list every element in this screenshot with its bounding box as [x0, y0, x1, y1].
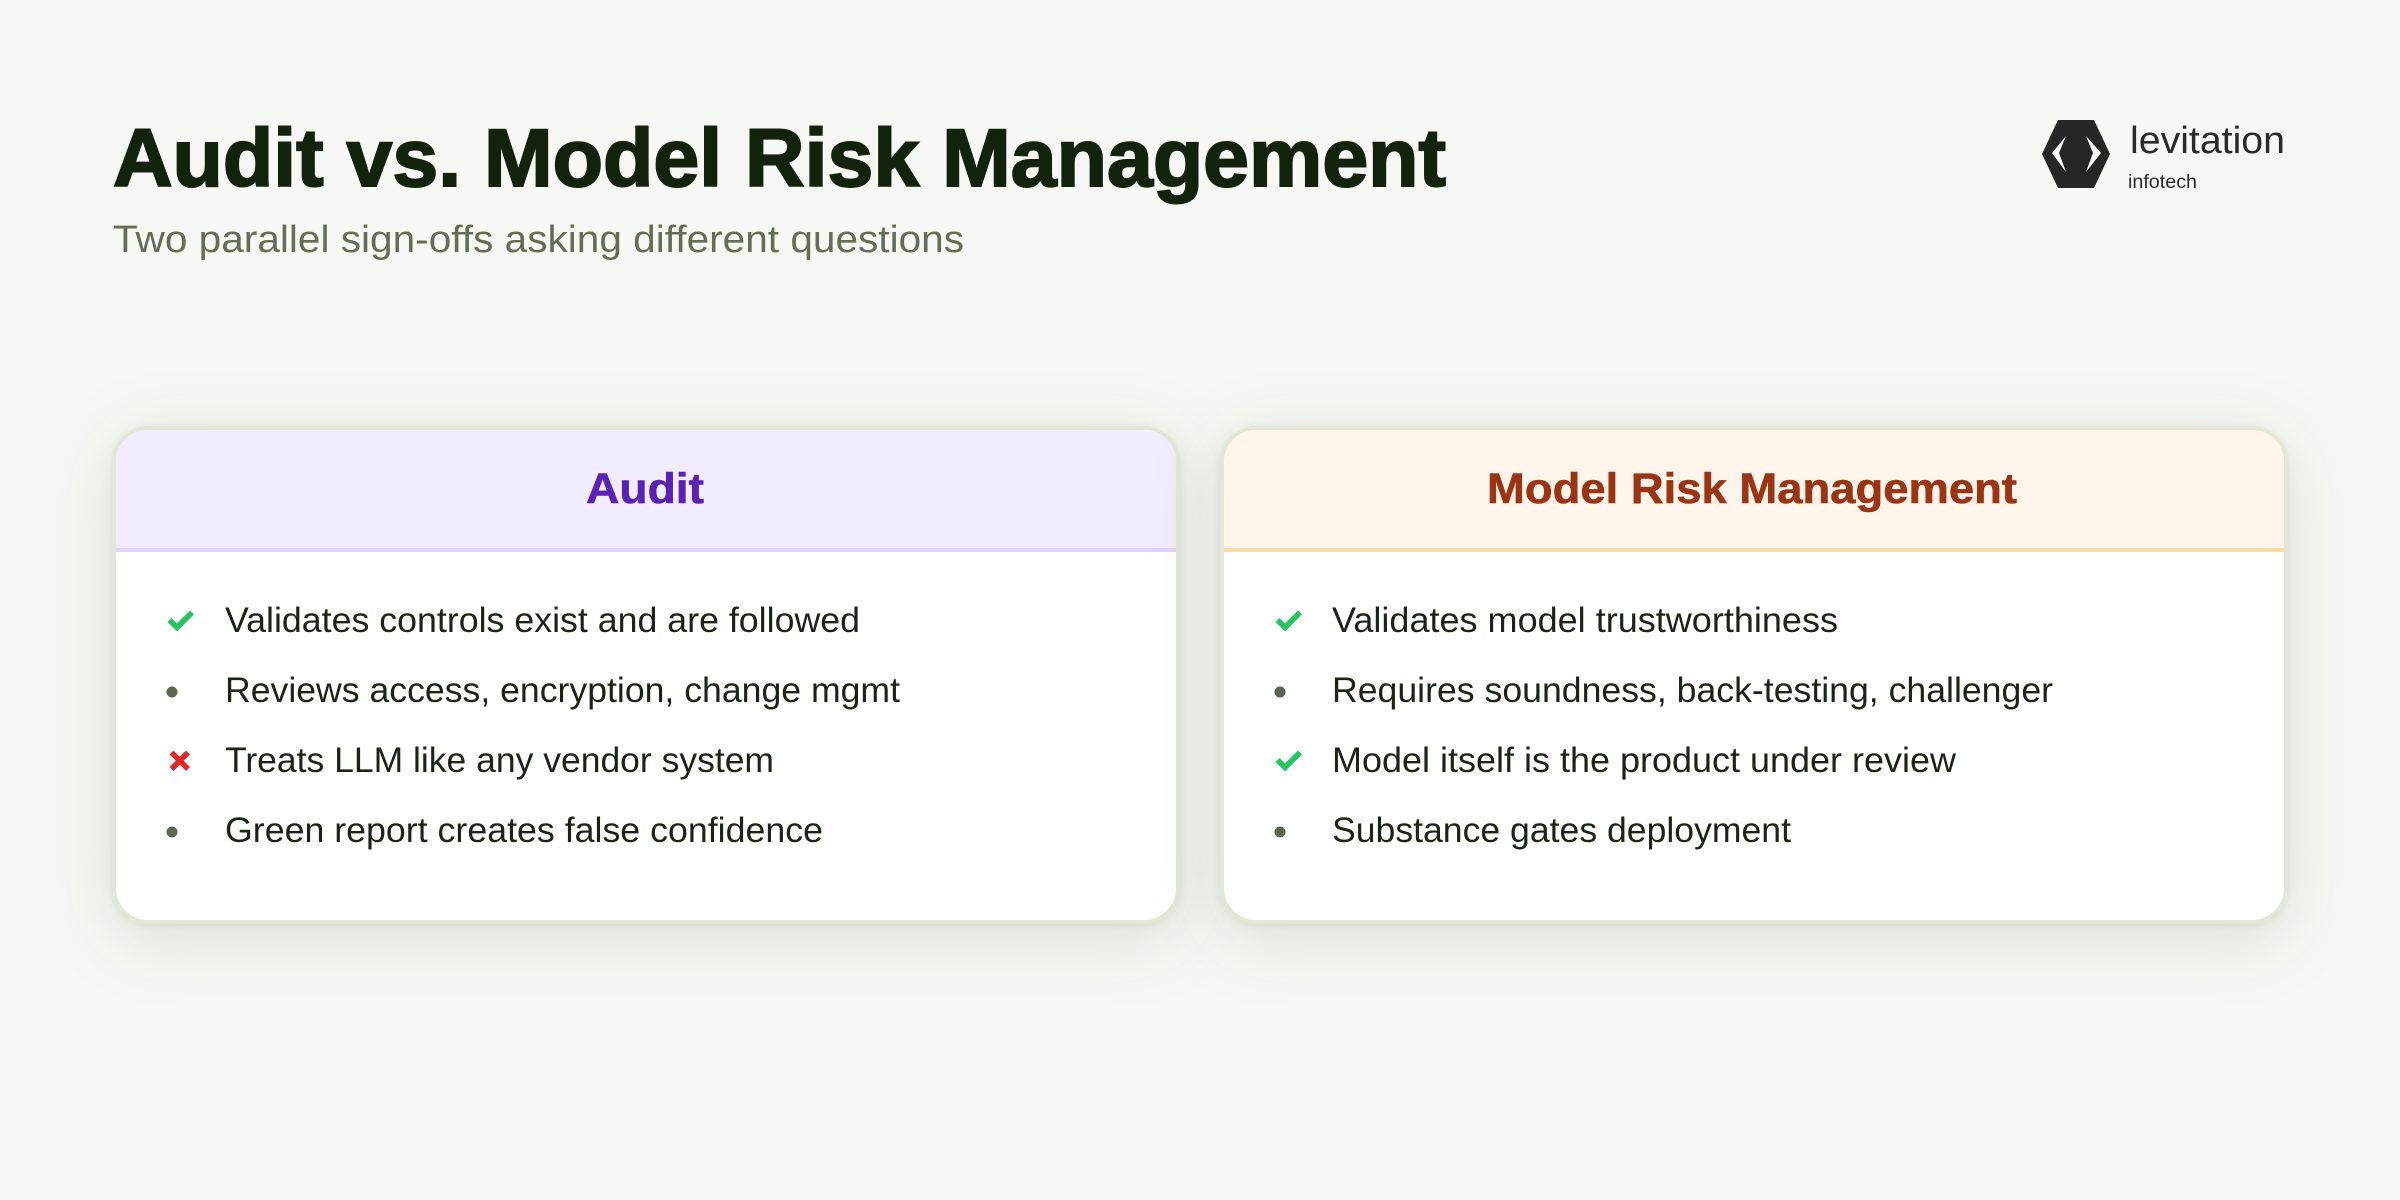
panel: Audit — [114, 428, 1178, 922]
list item: cross: Treats LLM like any vendor system — [225, 741, 774, 780]
card background — [114, 428, 1178, 922]
subtitle: Two parallel sign-offs asking different questions — [113, 219, 964, 261]
list item: check: Validates model trustworthiness — [1332, 601, 1838, 640]
list item: neutral: Reviews access, encryption, change mgmt — [225, 671, 900, 710]
logo wordmark: levitation — [2130, 120, 2285, 162]
list item: neutral: Green report creates false confidence — [225, 811, 823, 850]
list item: check: Model itself is the product under review — [1332, 741, 1957, 780]
title: Audit vs. Model Risk Management — [113, 113, 1446, 204]
list item: neutral: Substance gates deployment — [1332, 811, 1791, 850]
list item: neutral: Requires soundness, back-testing, challenger — [1332, 671, 2053, 710]
icon: hexagon with chevrons — [2042, 120, 2110, 188]
panel header: Model Risk Management — [1224, 430, 2284, 552]
panel header: Model Risk Management: Model Risk Management — [1487, 465, 2017, 513]
card background — [1222, 428, 2286, 922]
panel header: Audit — [116, 430, 1176, 552]
panel header: Audit: Audit — [586, 465, 704, 513]
logo sub-wordmark: infotech — [2128, 172, 2197, 193]
logo: levitation infotech — [2042, 120, 2285, 193]
panel: Model Risk Management — [1222, 428, 2286, 922]
list item: check: Validates controls exist and are followed — [225, 601, 860, 640]
